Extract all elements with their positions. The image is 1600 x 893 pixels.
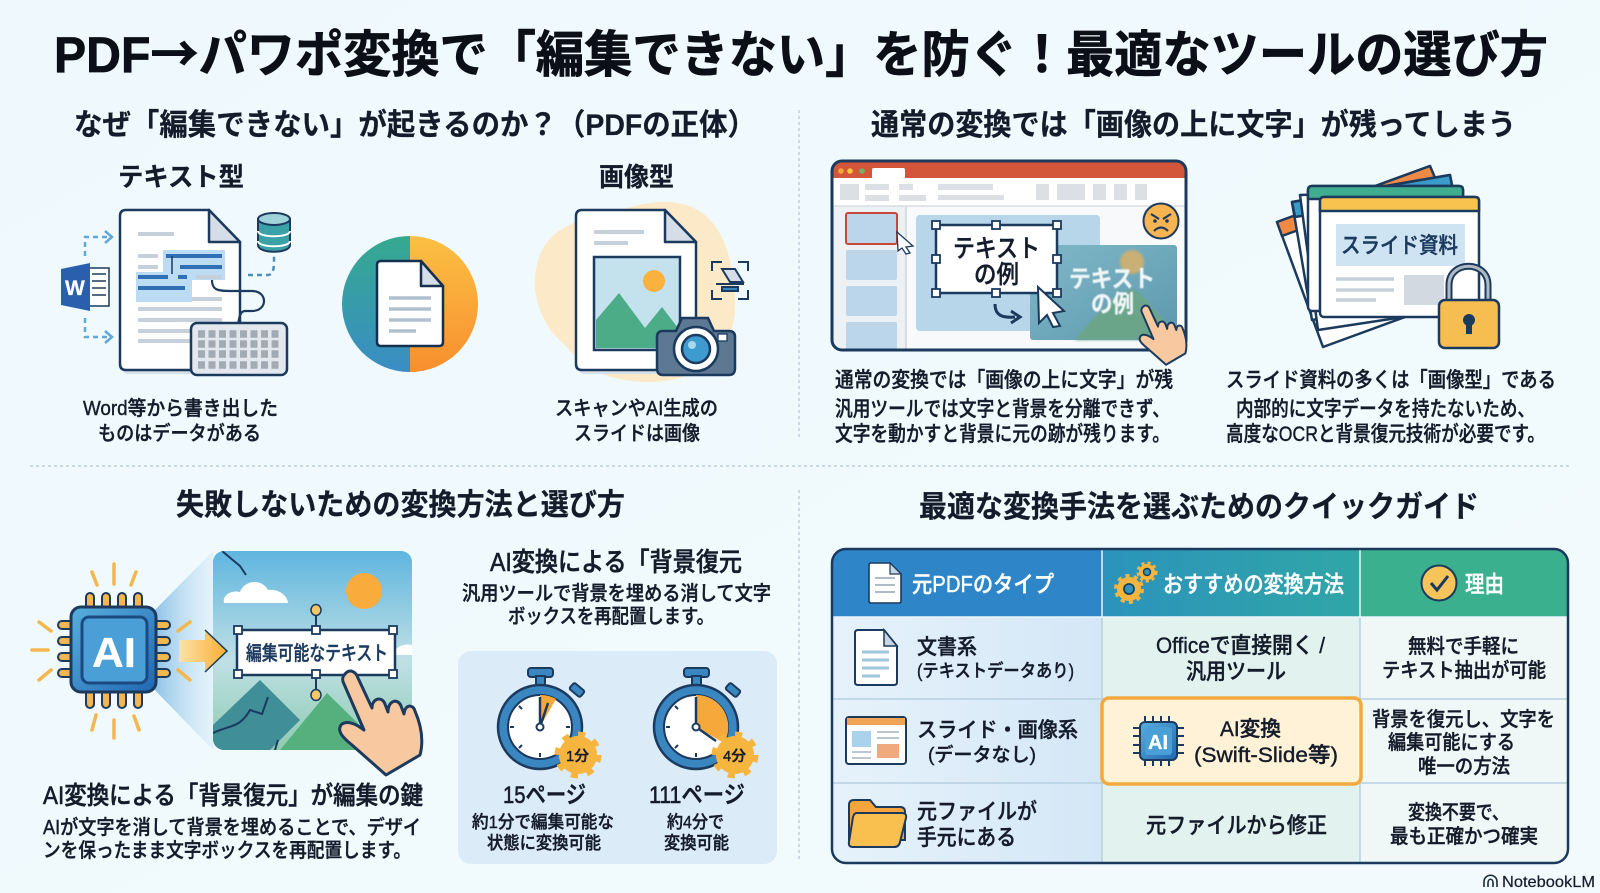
row 1: document: (テキストデータあり) xyxy=(917,660,1074,681)
illustration: light cone xyxy=(150,551,213,750)
row 3: original file: 元ファイルが xyxy=(917,799,1037,824)
row 2: AI conversion: AI変換 xyxy=(1220,718,1281,741)
row 2: AI conversion: 唯一の方法 xyxy=(1418,755,1510,778)
stat: 111 pages xyxy=(649,782,745,853)
caption: normal conversion xyxy=(835,369,1173,446)
header: recommended method: おすすめの変換方法 xyxy=(1163,571,1344,597)
panel: quick guide xyxy=(832,491,1568,863)
caption: text type: ものはデータがある xyxy=(98,421,261,445)
highlight cell: AI conversion xyxy=(1102,698,1361,784)
label: image type: 画像型 xyxy=(599,162,674,192)
row 1: document: 汎用ツール xyxy=(1186,659,1286,684)
text block: background restoration: AI変換による「背景復元 xyxy=(490,547,742,577)
caption: image-type slides xyxy=(1226,369,1556,446)
row 2: AI conversion: AI xyxy=(1148,732,1168,754)
icon: hand pointer xyxy=(1140,305,1186,365)
editable text box: 編集可能なテキスト xyxy=(246,642,388,665)
table: comparison xyxy=(832,549,1568,863)
arrow: chip to picture xyxy=(179,630,227,672)
header: recommended method xyxy=(1116,563,1344,602)
icon: connector cable xyxy=(212,280,264,325)
icon: center split circle xyxy=(342,236,478,372)
illustration: PowerPoint window xyxy=(832,161,1186,352)
caption: normal conversion: 通常の変換では「画像の上に文字」が残 xyxy=(835,369,1173,392)
icon: database xyxy=(258,213,290,252)
row 2: AI conversion: 編集可能にする xyxy=(1388,731,1515,754)
header: reason xyxy=(1422,566,1504,600)
icon: camera xyxy=(657,318,735,375)
icon: keyboard xyxy=(191,323,287,375)
icon: small cursor xyxy=(897,232,913,254)
row 3: original file: 手元にある xyxy=(917,825,1016,850)
caption: normal conversion: 汎用ツールでは文字と背景を分離できず、 xyxy=(835,398,1170,421)
row 2: slides and images xyxy=(846,717,1078,766)
stat: 15 pages xyxy=(472,782,614,853)
icon: angry face xyxy=(1144,204,1178,238)
icon: AI chip: AI xyxy=(92,629,136,676)
heading: normal conversion: 通常の変換では「画像の上に文字」が残ってしまう xyxy=(871,108,1516,142)
text block: AI key: ンを保ったまま文字ボックスを再配置します。 xyxy=(43,839,411,862)
header: reason: 理由 xyxy=(1465,571,1504,597)
stat: 15 pages: 約1分で編集可能な xyxy=(472,812,614,832)
row 3: original file: 最も正確かつ確実 xyxy=(1390,825,1538,848)
caption: image type: スキャンやAI生成の xyxy=(555,397,718,420)
illustration: slide stack with lock: スライド資料 xyxy=(1341,233,1458,258)
label: text type: テキスト型 xyxy=(118,162,244,192)
icon: stopwatch 4 minutes xyxy=(654,668,754,774)
row 2: slides and images: スライド・画像系 xyxy=(917,719,1078,742)
caption: normal conversion: 文字を動かすと背景に元の跡が残ります。 xyxy=(835,423,1170,446)
row 1: document: Officeで直接開く / xyxy=(1156,633,1326,658)
text block: background restoration xyxy=(462,547,771,628)
text box with handles: テキスト xyxy=(953,235,1040,263)
row 1: document: 無料で手軽に xyxy=(1408,635,1519,658)
caption: text type: Word等から書き出した xyxy=(83,397,278,420)
text block: background restoration: 汎用ツールで背景を埋める消して文字 xyxy=(462,582,771,605)
panel: why not editable xyxy=(61,108,756,445)
stat: 15 pages: 15ページ xyxy=(503,782,586,809)
icon: Word file: W xyxy=(65,277,85,300)
caption: image-type slides: 高度なOCRと背景復元技術が必要です。 xyxy=(1226,423,1545,446)
caption: text type xyxy=(83,397,278,445)
row 2: AI conversion: (Swift-Slide等) xyxy=(1194,744,1338,767)
heading: why: なぜ「編集できない」が起きるのか？（PDFの正体） xyxy=(74,108,756,142)
row 3: original file: 元ファイルから修正 xyxy=(1146,813,1327,838)
panel: speed stats xyxy=(458,651,777,864)
stat: 15 pages: 状態に変換可能 xyxy=(487,833,601,853)
row 2: AI conversion xyxy=(1133,708,1555,778)
header: PDF type: 元PDFのタイプ xyxy=(912,571,1054,597)
text block: AI key: AIが文字を消して背景を埋めることで、デザイ xyxy=(43,815,421,839)
title: PDF→パワポ変換で「編集できない」を防ぐ！最適なツールの選び方 xyxy=(54,15,1548,87)
row 1: document xyxy=(855,630,1546,685)
text block: AI key: AI変換による「背景復元」が編集の鍵 xyxy=(43,782,423,810)
stat: 111 pages: 111ページ xyxy=(649,782,745,809)
caption: image type: スライドは画像 xyxy=(574,422,700,445)
panel: how to convert xyxy=(32,489,777,864)
icon: large cursor xyxy=(1038,287,1064,327)
illustration: ghost background text: の例 xyxy=(1091,291,1134,318)
editable text box xyxy=(234,604,397,700)
arrows: word to doc xyxy=(85,231,274,343)
caption: image type xyxy=(555,397,718,445)
row 3: original file: 変換不要で、 xyxy=(1408,801,1509,824)
icon: scan xyxy=(712,262,748,299)
stat: 111 pages: 変換可能 xyxy=(664,833,729,853)
row 1: document: 文書系 xyxy=(917,636,977,659)
icon: move arrow xyxy=(995,304,1020,323)
illustration: ghost background text: テキスト xyxy=(1069,266,1155,293)
heading: quick guide: 最適な変換手法を選ぶためのクイックガイド xyxy=(919,491,1479,524)
row 1: document: テキスト抽出が可能 xyxy=(1382,659,1546,682)
caption: image-type slides: 内部的に文字データを持たないため、 xyxy=(1236,397,1535,421)
icon: AI chip xyxy=(32,564,190,738)
row 3: original file xyxy=(849,799,1538,850)
text box with handles xyxy=(932,221,1061,297)
text box with handles: の例 xyxy=(974,261,1019,289)
header: PDF type xyxy=(869,563,1054,603)
icon: stopwatch 1 minute: 1分 xyxy=(566,748,589,765)
illustration: restored picture xyxy=(213,551,420,750)
panel: normal conversion xyxy=(832,108,1556,446)
icon: hand xyxy=(340,671,422,775)
icon: stopwatch 4 minutes: 4分 xyxy=(723,748,746,765)
caption: image-type slides: スライド資料の多くは「画像型」である xyxy=(1226,369,1556,392)
illustration: slide stack with lock xyxy=(1277,166,1499,348)
text block: background restoration: ボックスを再配置します。 xyxy=(508,605,714,628)
row 2: AI conversion: 背景を復元し、文字を xyxy=(1372,708,1555,731)
icon: Word file xyxy=(61,263,109,311)
watermark: NotebookLM: NotebookLM xyxy=(1502,874,1595,891)
illustration: ghost background text xyxy=(1030,245,1177,340)
icon: image PDF document xyxy=(535,202,735,382)
stat: 111 pages: 約4分で xyxy=(667,812,724,832)
icon: text PDF document xyxy=(120,210,242,374)
row 2: slides and images: (データなし) xyxy=(928,743,1036,766)
text block: AI key xyxy=(43,782,423,862)
heading: how to convert: 失敗しないための変換方法と選び方 xyxy=(176,489,625,522)
icon: stopwatch 1 minute xyxy=(498,668,597,774)
